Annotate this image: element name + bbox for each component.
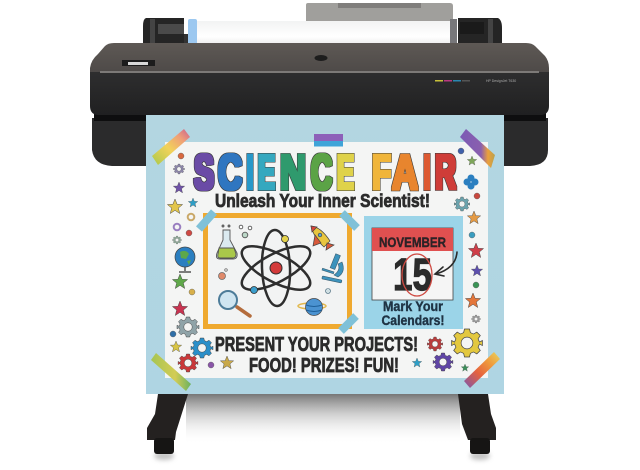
call to action: PRESENT YOUR PROJECTS!	[215, 334, 418, 356]
subtitle: Unleash Your Inner Scientist!	[215, 191, 430, 211]
title: R	[435, 146, 456, 200]
calendar	[372, 228, 457, 300]
calendar caption	[382, 299, 444, 328]
title: I	[247, 146, 253, 200]
control panel	[122, 60, 155, 66]
tape: frame corners	[199, 212, 357, 331]
rear output panel	[306, 3, 453, 24]
title	[194, 146, 456, 200]
printer front	[90, 72, 549, 115]
printer lower body	[92, 118, 548, 166]
month: NOVEMBER	[379, 234, 446, 250]
title: E	[337, 146, 354, 200]
calendar header	[372, 228, 453, 251]
lid edge highlight	[100, 71, 539, 73]
icon: globe	[175, 247, 195, 272]
decorative stars	[167, 156, 484, 371]
title: A	[392, 146, 418, 200]
poster background	[146, 115, 504, 394]
title: C	[311, 146, 332, 200]
tape: top right	[460, 129, 495, 168]
date: 15	[393, 249, 432, 300]
science image frame	[206, 216, 350, 326]
floor shadow	[154, 394, 490, 460]
calendar caption: Calendars!	[382, 313, 444, 328]
tape: bottom right	[464, 352, 500, 388]
paper roll	[188, 19, 457, 47]
icon: rocket	[311, 226, 334, 250]
hp logo	[314, 55, 328, 61]
blue flower	[464, 174, 478, 190]
title: I	[424, 146, 430, 200]
printer recess	[94, 112, 546, 121]
tape: top centre	[314, 134, 343, 146]
call to action: FOOD! PRIZES! FUN!	[249, 355, 399, 377]
right spindle holder	[458, 18, 502, 45]
date circle	[402, 254, 432, 296]
decorative gears	[173, 164, 482, 372]
icon: magnifying glass	[219, 291, 250, 316]
title: N	[280, 146, 306, 200]
left spindle holder	[143, 18, 190, 45]
printer stand legs	[147, 394, 496, 454]
tape: top left	[152, 129, 190, 165]
poster	[146, 115, 504, 394]
icon: microscope	[322, 254, 343, 294]
decorative dots and rings	[170, 148, 480, 368]
call to action	[215, 334, 418, 377]
title: E	[258, 146, 275, 200]
arrow	[435, 252, 457, 276]
icon: planet	[298, 298, 326, 316]
title: C	[218, 146, 242, 200]
calendar caption: Mark Your	[383, 299, 444, 314]
poster white panel	[165, 142, 488, 378]
tape: bottom left	[151, 353, 191, 391]
icon: bubbles	[218, 269, 227, 280]
printer lid	[90, 43, 549, 72]
atom	[236, 230, 316, 306]
ink colour markers	[435, 80, 470, 82]
calendar panel	[364, 216, 463, 329]
title: S	[194, 146, 214, 200]
title: F	[372, 146, 391, 200]
printer model label: HP DesignJet T630	[486, 79, 516, 83]
icon: flask	[216, 225, 252, 259]
